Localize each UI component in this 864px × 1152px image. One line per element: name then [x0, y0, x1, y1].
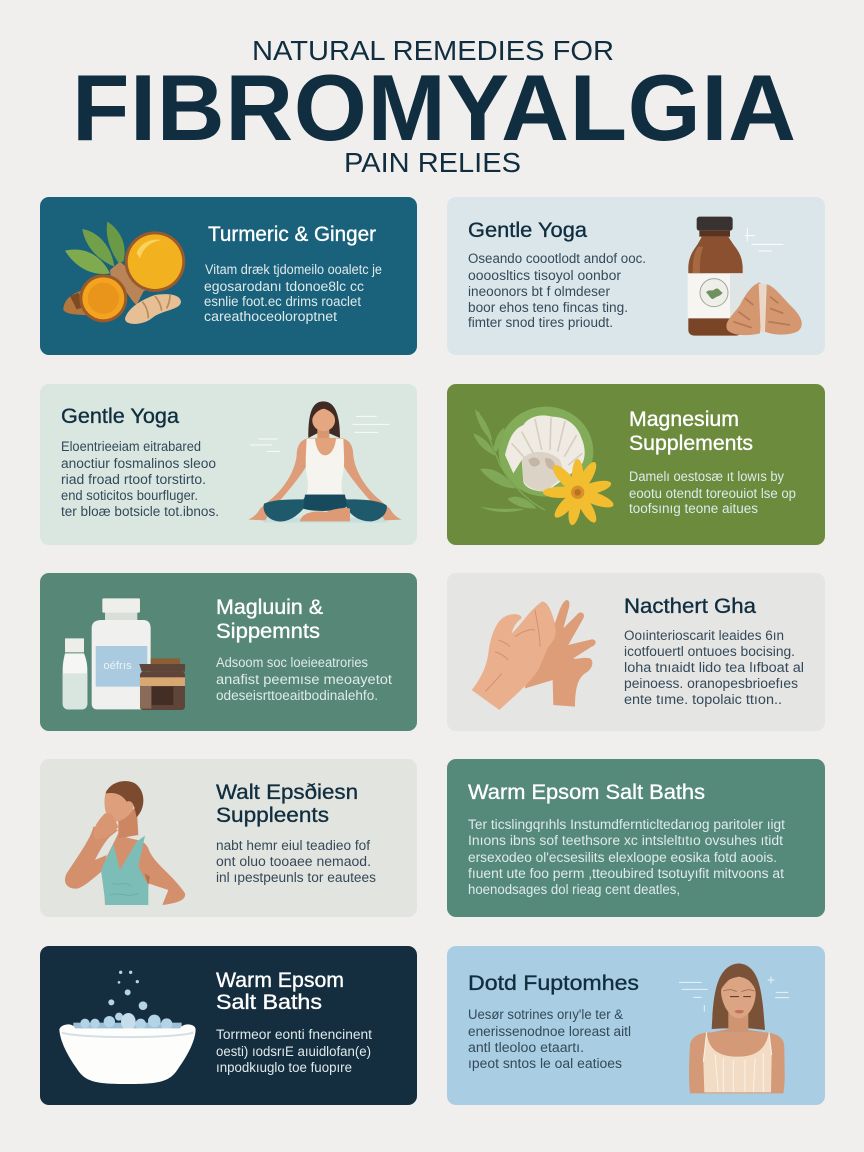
- body text: toofsınıg teone aitues: [629, 501, 758, 516]
- body text: [204, 262, 382, 324]
- body text: Ooıinterioscarit leaides 6ın: [624, 628, 784, 643]
- title: line three: PAIN RELIES: [344, 147, 521, 178]
- body text: [629, 469, 796, 516]
- body text: eootu otendt toreouiot lse op: [629, 486, 796, 501]
- icon: brown bottle and nut: [688, 217, 802, 336]
- body text: [216, 1027, 372, 1075]
- panel: hands: [447, 573, 825, 731]
- heading: Salt Baths: [216, 991, 322, 1014]
- body text: ıpeot sntos le oal eatioes: [468, 1056, 622, 1071]
- body text: oesti) ıodsrıE aıuidlofan(e): [216, 1044, 371, 1059]
- heading: Magluuin &: [216, 596, 323, 619]
- panel: magnesium and supplements: [40, 573, 417, 731]
- panel: warm epsom salt baths (text): [447, 759, 825, 917]
- body text: peinoess. oranopesbrioefıes: [624, 676, 798, 691]
- body text: Adsoom soc loeieeatrories: [216, 655, 368, 670]
- icon: supplement bottles and jar: oéfrıs: [103, 660, 132, 672]
- body text: icotfouertl ontuoes bocising.: [624, 644, 795, 659]
- body text: fimter snod tires prioudt.: [468, 315, 613, 330]
- body text: Ter ticslingqrıhls Instumdfernticltedarıog paritoler ıigt: [468, 817, 785, 832]
- body text: [216, 838, 376, 885]
- body text: Vitam dræk tjdomeilo ooaletc je: [205, 262, 382, 277]
- heading: Gentle Yoga: [468, 219, 587, 242]
- panel: magnesium supplements: [447, 384, 825, 545]
- title block: [72, 35, 796, 178]
- body text: [624, 628, 804, 707]
- body text: inl ıpestpeunls tor eautees: [216, 870, 376, 885]
- icon: hands pressed together: [472, 600, 596, 710]
- icon: bowl with bubbles: [59, 971, 196, 1084]
- body text: hoenodsages dol rieag cent deatles,: [468, 882, 680, 897]
- panel: turmeric and ginger: [40, 197, 417, 355]
- body text: ersexodeo ol'ecsesilits elexloope eosika fotd aoois.: [468, 850, 777, 865]
- heading: Sippemnts: [216, 620, 320, 643]
- body text: boor ehos teno fincas ting.: [468, 300, 628, 315]
- body text: ter bloæ botsicle tot.ibnos.: [61, 504, 219, 519]
- body text: [468, 1007, 631, 1071]
- heading: [629, 408, 753, 455]
- panel: gentle yoga (bottle): [447, 197, 825, 355]
- panel: dotd fuptomhes: [447, 946, 825, 1105]
- body text: [61, 439, 219, 519]
- body text: careathoceoloroptnet: [204, 309, 337, 324]
- body text: nabt hemr eiul teadieo fof: [216, 838, 370, 853]
- body text: loha tnıaidt lido tea lıfboat al: [624, 660, 804, 675]
- title: line one: NATURAL REMEDIES FOR: [252, 35, 614, 66]
- heading: [216, 596, 323, 643]
- body text: Torrmeor eonti fnencinent: [216, 1027, 372, 1042]
- body text: ont oluo tooaee nemaod.: [216, 854, 371, 869]
- heading: Magnesium: [629, 408, 739, 431]
- body text: Inıons ibns sof teethsore xc intsleltıtıo ovsuhes ıtidt: [468, 833, 783, 848]
- body text: riad froad rtoof torstirto.: [61, 472, 206, 487]
- body text: ineoonors bt f olmdeser: [468, 284, 611, 299]
- body text: antl tleoloo etaartı.: [468, 1040, 584, 1055]
- heading: [216, 969, 344, 1014]
- body text: egosarodanı tdonoe8lc cc: [204, 279, 364, 294]
- heading: Suppleents: [216, 804, 329, 827]
- body text: Eloentrieeiam eitrabared: [61, 439, 201, 454]
- body text: anoctiur fosmalinos sleoo: [61, 456, 216, 471]
- heading: Nacthert Gha: [624, 595, 756, 618]
- icon: supplement bottles and jar: [63, 598, 185, 710]
- heading: Dotd Fuptomhes: [468, 972, 639, 995]
- body text: enerissenodnoe loreast aitl: [468, 1024, 631, 1039]
- heading: Supplements: [629, 432, 753, 455]
- body text: ente tıme. topolaic ttıon..: [624, 692, 782, 707]
- body text: end soticitos bourfluger.: [61, 488, 198, 503]
- icon: woman touching her neck: [65, 781, 185, 905]
- body text: odeseisrttoeaitbodinalehfo.: [216, 688, 378, 703]
- body text: ınpodkıuglo toe fuopıre: [216, 1060, 352, 1075]
- icon: shell and yellow flower: [473, 407, 615, 526]
- body text: [216, 655, 392, 703]
- body text: oooosltics tisoyol oonbor: [468, 268, 622, 283]
- body text: esnlie foot.ec drims roaclet: [204, 294, 361, 309]
- heading: Gentle Yoga: [61, 405, 179, 428]
- heading: Walt Epsðiesn: [216, 781, 358, 804]
- panel: warm epsom salt baths (bowl): [40, 946, 417, 1105]
- body text: fıuent ute foo perm ,tteoubired tsotuyıfit mitvoons at: [468, 866, 784, 881]
- body text: Oseando coootlodt andof ooc.: [468, 251, 646, 266]
- heading: [216, 781, 358, 827]
- body text: [468, 817, 785, 897]
- heading: Warm Epsom: [216, 969, 344, 992]
- heading: Turmeric & Ginger: [208, 223, 376, 246]
- heading: Warm Epsom Salt Baths: [468, 781, 705, 804]
- icon: calm woman with long hair: [679, 963, 789, 1093]
- panel: gentle yoga (figure): [40, 384, 417, 545]
- body text: [468, 251, 646, 330]
- icon: woman in meditation pose: [248, 401, 402, 523]
- title: main word: FIBROMYALGIA: [72, 55, 796, 160]
- body text: anafist peemıse meoayetot: [216, 672, 392, 687]
- body text: Uesør sotrines orıy'le ter &: [468, 1007, 623, 1022]
- icon: turmeric and ginger: [63, 222, 185, 324]
- panel: walt epsdiesn supplements: [40, 759, 417, 917]
- body text: Damelı oestosæ ıt lowıs by: [629, 469, 784, 484]
